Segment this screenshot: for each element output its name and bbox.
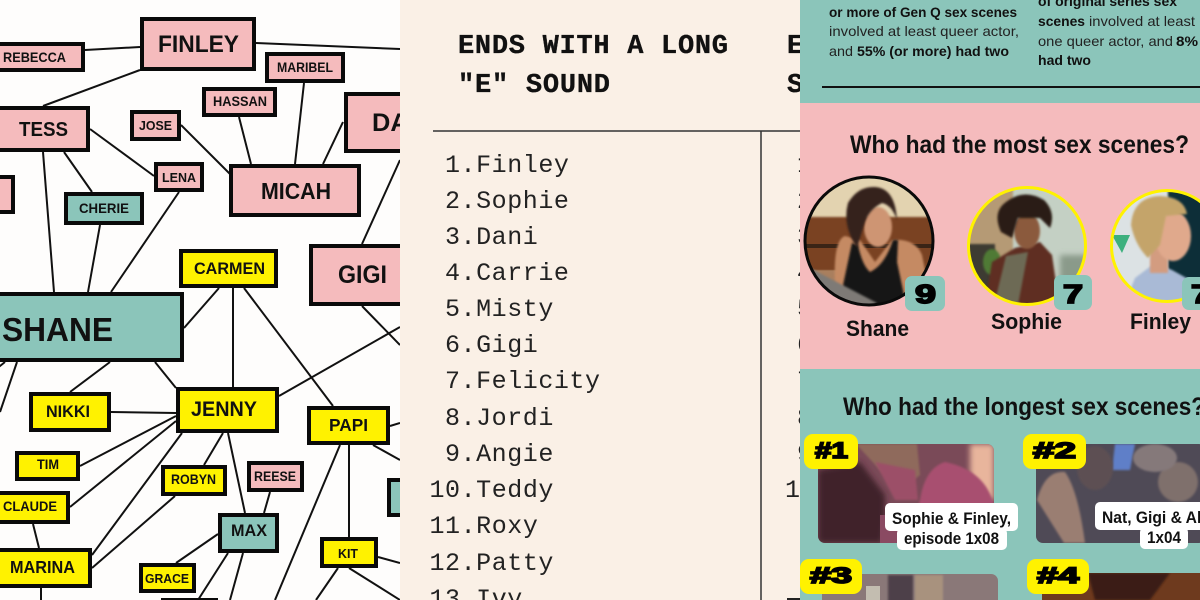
name list: 12.Patty xyxy=(430,549,554,578)
panel: relationship network chart xyxy=(0,17,400,600)
name list: 9.Angie xyxy=(445,440,554,469)
node: Lena xyxy=(156,164,202,190)
panel: name sound table xyxy=(400,0,813,600)
node: Gigi xyxy=(309,244,400,306)
node: Tess xyxy=(0,108,88,150)
stat text: original series: 8% xyxy=(1176,33,1199,49)
node: Nikki: NIKKI xyxy=(46,402,90,421)
cropped second column numbers: 8 xyxy=(797,404,813,433)
node: Hassan: HASSAN xyxy=(213,94,267,109)
name list: 11.Roxy xyxy=(430,512,538,541)
node: Micah xyxy=(231,166,359,215)
node: Finley: FINLEY xyxy=(158,31,239,58)
cropped second column numbers: 1 xyxy=(797,151,813,180)
table rules xyxy=(433,131,800,600)
name list: 10.Teddy xyxy=(430,476,554,505)
name: Finley: Finley xyxy=(1130,309,1192,334)
name list: 2.Sophie xyxy=(445,187,569,216)
node: Carmen: CARMEN xyxy=(194,259,265,278)
node: Papi: PAPI xyxy=(329,415,368,435)
node: Claude xyxy=(0,493,68,522)
cropped second column numbers: 4 xyxy=(797,259,813,288)
node: Papi xyxy=(309,408,388,443)
node: Carmen xyxy=(181,251,276,286)
scene still: #4 xyxy=(1042,573,1200,600)
node: Tim xyxy=(17,453,78,479)
cropped second column heading: E xyxy=(787,32,803,62)
node: Cherie xyxy=(66,194,142,223)
node: Micah: MICAH xyxy=(261,178,331,204)
panel: statistics and rankings xyxy=(800,0,1200,600)
column heading: ends with a long E sound: "E" SOUND xyxy=(458,71,610,101)
node: cropped teal box xyxy=(387,478,400,517)
cropped second column numbers: 5 xyxy=(797,295,813,324)
stat text: original series xyxy=(1038,0,1199,68)
rank label: #1: #1 xyxy=(815,438,848,463)
photo: Sophie xyxy=(965,185,1090,310)
stat text: Gen Q: or more of Gen Q sex scenes xyxy=(829,4,1017,20)
cropped second column heading xyxy=(787,34,800,92)
node: Marina xyxy=(0,550,90,586)
count badge: Shane xyxy=(905,276,945,311)
node: Jose xyxy=(132,112,179,139)
photo: Finley xyxy=(1110,190,1200,310)
cropped second column numbers: 2 xyxy=(797,187,813,216)
name list: 7.Felicity xyxy=(445,367,601,396)
node: Dani xyxy=(344,92,400,153)
connection lines between characters xyxy=(0,43,400,600)
node: Rebecca xyxy=(0,44,83,70)
scene still: #1 xyxy=(818,444,994,543)
cropped second column numbers: 3 xyxy=(797,223,813,252)
node: Grace: GRACE xyxy=(145,571,189,586)
node: Gigi: GIGI xyxy=(338,261,387,289)
scene still: #3 xyxy=(822,574,998,600)
node: Shane xyxy=(0,294,182,360)
column heading: ends with a long E sound xyxy=(460,34,727,92)
scene still: #2 xyxy=(1036,444,1200,543)
node: Kit: KIT xyxy=(338,546,358,561)
stat text: Gen Q: involved at least queer actor, xyxy=(829,23,1019,39)
stat text: Gen Q: and xyxy=(829,43,853,59)
node: Claude: CLAUDE xyxy=(3,498,57,514)
name list: 3.Dani xyxy=(445,223,538,252)
node: Jose: JOSE xyxy=(139,118,172,133)
node: Tess: TESS xyxy=(19,119,68,141)
node: Hassan xyxy=(204,89,275,115)
node: Jenny: JENNY xyxy=(191,398,257,421)
caption: Sophie and Finley xyxy=(885,503,1018,550)
cropped second column numbers: 1 xyxy=(785,476,801,505)
node: Shane: SHANE xyxy=(2,311,113,348)
node: Rebecca: REBECCA xyxy=(3,49,66,65)
node: Maribel xyxy=(267,54,343,81)
rank label: #1 xyxy=(804,434,858,469)
node: Grace xyxy=(141,565,194,591)
node: Max: MAX xyxy=(231,521,268,540)
node: Robyn: ROBYN xyxy=(171,471,216,487)
cropped second column heading: S xyxy=(787,71,803,101)
name list: 5.Misty xyxy=(445,295,554,324)
photo: Shane xyxy=(804,176,934,306)
stat text: original series: scenes xyxy=(1038,13,1085,29)
node: Marina: MARINA xyxy=(10,557,75,577)
node: Maribel: MARIBEL xyxy=(277,60,333,75)
node: Reese xyxy=(249,463,302,490)
stat text: original series: had two xyxy=(1038,52,1091,68)
cropped second column numbers: 7 xyxy=(797,367,813,396)
cropped second column numbers xyxy=(786,158,800,497)
name list xyxy=(430,151,601,600)
node: Tim: TIM xyxy=(37,456,59,472)
cropped second column numbers: 9 xyxy=(797,440,813,469)
name list: 8.Jordi xyxy=(445,404,554,433)
name list: 4.Carrie xyxy=(445,259,569,288)
node: Jenny xyxy=(178,389,277,431)
node: Robyn xyxy=(163,467,225,494)
node: Lena: LENA xyxy=(162,170,197,185)
stat text: Gen Q xyxy=(829,4,1019,59)
count badge: Sophie: 7 xyxy=(1063,279,1083,309)
node: Kit xyxy=(322,539,376,566)
count badge: Finley xyxy=(1182,277,1200,310)
name: Shane: Shane xyxy=(846,316,909,341)
name list: 1.Finley xyxy=(445,151,569,180)
node: cropped pink box xyxy=(0,177,13,212)
rank label: #2: #2 xyxy=(1033,438,1076,463)
stat text: Gen Q: 55% (or more) had two xyxy=(857,43,1009,59)
stat text: original series: involved at least xyxy=(1089,13,1195,29)
node: Cherie: CHERIE xyxy=(79,200,129,216)
count badge: Sophie xyxy=(1054,275,1092,310)
caption: Sophie and Finley: episode 1x08 xyxy=(904,529,999,548)
node: Max xyxy=(220,515,277,551)
rank label: #4: #4 xyxy=(1037,563,1080,588)
caption: Nat, Gigi and Ali xyxy=(1095,502,1200,549)
name list: 6.Gigi xyxy=(445,331,538,360)
rank label: #4 xyxy=(1027,559,1089,594)
count badge: Shane: 9 xyxy=(915,279,936,309)
rank label: #3: #3 xyxy=(810,563,852,588)
node: Dani: DANI xyxy=(372,109,434,137)
rank label: #3 xyxy=(800,559,862,594)
caption: Sophie and Finley: Sophie & Finley, xyxy=(892,509,1011,528)
rank label: #2 xyxy=(1023,434,1086,469)
node: Reese: REESE xyxy=(254,469,296,484)
stat text: original series: one queer actor, and xyxy=(1038,33,1173,49)
column heading: ends with a long E sound: ENDS WITH A LONG xyxy=(458,32,728,62)
caption: Nat, Gigi and Ali: 1x04 xyxy=(1147,528,1181,547)
node: Nikki xyxy=(31,394,109,430)
name: Sophie: Sophie xyxy=(991,309,1062,334)
node: Finley xyxy=(142,19,254,69)
cropped second column numbers: 6 xyxy=(797,331,813,360)
